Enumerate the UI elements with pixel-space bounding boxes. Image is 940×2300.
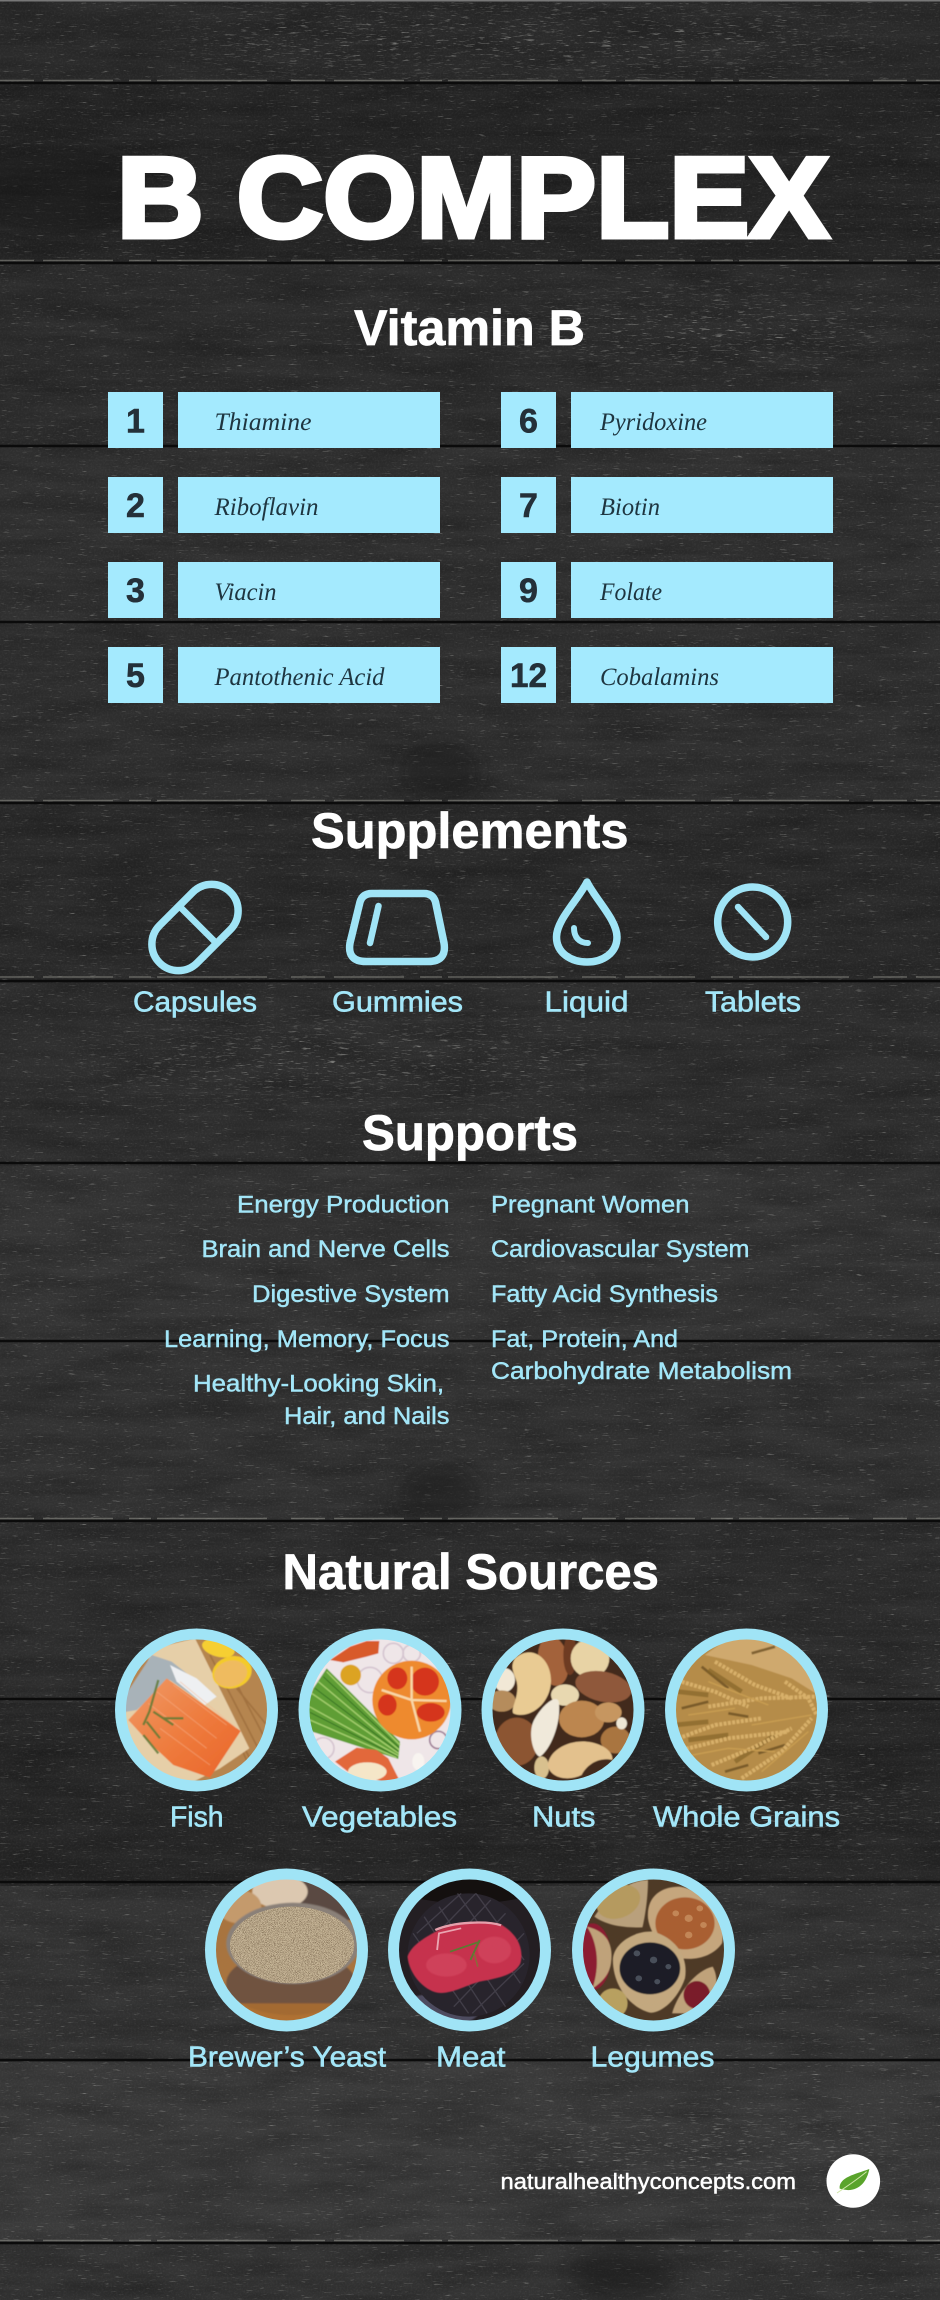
footer website: naturalhealthyconcepts.com [500, 2169, 796, 2194]
vitamin 6: Pyridoxine [599, 409, 707, 436]
text block: supports left column: Hair, and Nails [284, 1403, 450, 1430]
vitamin 12 [501, 647, 833, 703]
text block: supports right column: Pregnant Women [491, 1192, 690, 1218]
heading: Natural Sources: Natural Sources [282, 1544, 659, 1600]
vitamin 9: 9 [519, 572, 538, 610]
vitamin 2 [108, 477, 440, 533]
photo: legumes [572, 1867, 739, 2033]
vitamin 7: 7 [519, 487, 538, 525]
text block: supports left column [164, 1192, 450, 1430]
icon: capsule [141, 873, 249, 982]
vitamin 5: Pantothenic Acid [214, 664, 385, 691]
text block: supports right column: Carbohydrate Metabolism [491, 1358, 792, 1385]
vitamin 1: 1 [126, 402, 145, 440]
photo: nuts [487, 1634, 639, 1786]
vitamin 5: 5 [126, 657, 145, 695]
photo: brewer's yeast [202, 1867, 369, 2033]
heading: Supports: Supports [362, 1105, 578, 1161]
text block: supports left column: Brain and Nerve Cells [202, 1236, 450, 1263]
photo: whole grains [670, 1634, 825, 1786]
vitamin 9 [501, 562, 833, 618]
photo: vegetables [303, 1634, 457, 1786]
label: nuts: Nuts [532, 1802, 596, 1834]
label: gummies: Gummies [332, 986, 463, 1018]
vitamin 7 [501, 477, 833, 533]
label: brewer's yeast: Brewer’s Yeast [188, 2042, 386, 2074]
text block: supports left column: Healthy-Looking Skin, [193, 1370, 444, 1398]
photo: fish [120, 1634, 273, 1786]
text block: supports left column: Digestive System [252, 1281, 450, 1308]
text block: supports right column [491, 1192, 792, 1385]
text block: supports left column: Energy Production [237, 1192, 450, 1218]
vitamin 6 [501, 392, 833, 448]
vitamin 12: 12 [510, 657, 547, 695]
icon: liquid drop [556, 882, 617, 962]
panel: supplement forms [133, 873, 801, 1018]
text block: supports right column: Cardiovascular System [491, 1236, 750, 1263]
vitamin 9: Folate [599, 579, 662, 606]
label: whole grains: Whole Grains [653, 1802, 840, 1834]
label: vegetables: Vegetables [302, 1802, 457, 1834]
panel: natural sources photos [120, 1634, 840, 2074]
label: meat: Meat [436, 2042, 506, 2074]
vitamin 2: Riboflavin [214, 494, 318, 521]
vitamin 5 [108, 647, 440, 703]
label: fish: Fish [170, 1802, 224, 1834]
text block: supports left column: Learning, Memory, Focus [164, 1326, 450, 1353]
text block: supports right column: Fat, Protein, And [491, 1326, 678, 1353]
vitamin 3 [108, 562, 440, 618]
text block: supports right column: Fatty Acid Synthesis [491, 1281, 718, 1308]
icon: tablet [718, 887, 788, 957]
vitamin 12: Cobalamins [600, 664, 719, 691]
title: B COMPLEX [117, 135, 829, 262]
vitamin 6: 6 [519, 402, 538, 440]
icon: leaf logo [826, 2154, 880, 2208]
label: tablets: Tablets [705, 986, 801, 1018]
heading: Vitamin B: Vitamin B [354, 300, 585, 356]
photo: meat [387, 1867, 554, 2033]
panel: vitamin B list [108, 392, 833, 703]
vitamin 7: Biotin [600, 494, 660, 521]
label: liquid: Liquid [544, 986, 628, 1018]
vitamin 1: Thiamine [214, 409, 312, 436]
heading: Supplements: Supplements [311, 803, 628, 859]
vitamin 3: 3 [126, 572, 145, 610]
label: legumes: Legumes [590, 2042, 714, 2074]
vitamin 1 [108, 392, 440, 448]
vitamin 3: Viacin [214, 579, 276, 606]
icon: gummy [350, 894, 444, 962]
label: capsules: Capsules [133, 986, 257, 1018]
vitamin 2: 2 [126, 487, 145, 525]
